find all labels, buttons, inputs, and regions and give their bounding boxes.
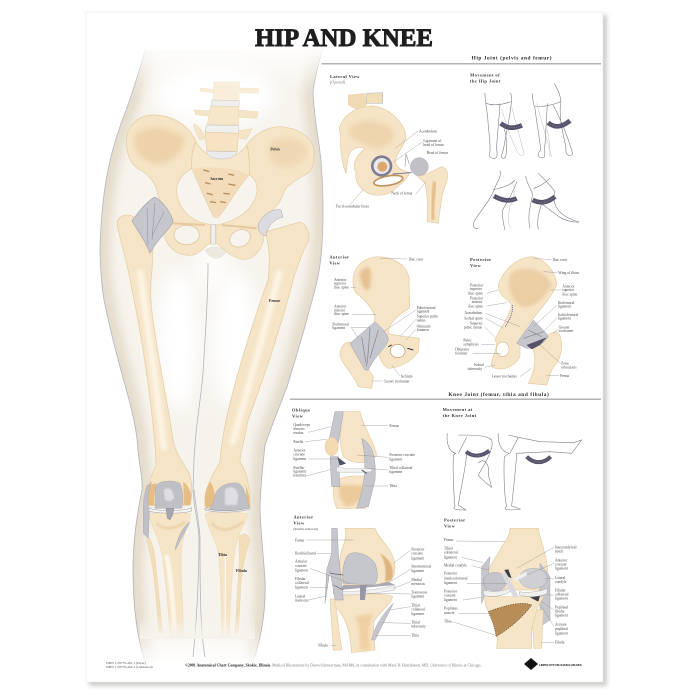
- body silhouette: [100, 48, 323, 662]
- labels: posterior hip: Wing of ilium: [558, 271, 579, 275]
- publisher logo: [524, 658, 582, 670]
- section: anterior and posterior knee views: [293, 514, 577, 653]
- left knee, tibia and fibula: [143, 481, 192, 637]
- labels: anterior knee, right side: ligament: [411, 556, 424, 560]
- labels: anterior hip: Iliofemoral: [332, 322, 349, 326]
- labels: anterior hip: iliac spine: [334, 285, 349, 289]
- labels: anterior knee, right side: Posterior: [411, 548, 425, 552]
- labels: femur, tibia, fibula: [218, 299, 281, 573]
- labels: posterior knee: muscle: [444, 611, 455, 615]
- labels: anterior knee, right side: ligament: [411, 569, 424, 573]
- pelvic floor form: [205, 247, 226, 258]
- anterior knee diagram: [325, 528, 395, 653]
- heading: movement of the hip joint: the Hip Joint: [470, 79, 501, 84]
- labels: anterior knee, left side: Anterior: [293, 514, 313, 519]
- heading: movement of the knee joint: Movement at: [443, 407, 473, 412]
- labels: anterior knee, left side: (Patella removed): [293, 527, 318, 531]
- labels: anterior hip: Ischium: [401, 374, 413, 378]
- labels: posterior hip: orbicularis: [561, 365, 577, 369]
- labels: posterior hip: tuberosity: [468, 367, 482, 371]
- labels: posterior hip: foramen: [455, 352, 467, 356]
- labels: oblique knee, right side: ligament: [389, 470, 402, 474]
- labels: oblique knee, left side: Patellar: [293, 466, 305, 470]
- labels: oblique knee, left side: Anterior: [293, 449, 307, 453]
- labels: posterior hip: Posterior: [470, 283, 484, 287]
- bone fade at shins: [140, 615, 255, 639]
- labels: posterior hip: iliac spine: [468, 304, 483, 308]
- labels: lateral view: Acetabulum: [419, 129, 437, 133]
- labels: posterior hip: ligament: [558, 317, 571, 321]
- labels: posterior knee: Fibula: [555, 640, 565, 644]
- labels: oblique knee, left side: Oblique: [292, 408, 311, 413]
- labels: anterior knee, right side: Transverse: [411, 590, 428, 594]
- labels: posterior knee: notch: [555, 550, 563, 554]
- labels: posterior knee: Popliteal: [555, 605, 568, 609]
- labels: anterior hip: Obturator: [417, 324, 432, 328]
- publisher logo: LIPPINCOTT WILLIAMS & WILKINS: [539, 663, 582, 667]
- labels: posterior knee: Femur: [444, 538, 454, 542]
- labels: oblique knee, right side: Femur: [389, 424, 400, 428]
- labels: posterior knee: ligament: [555, 597, 568, 601]
- labels: anterior knee, right side: ligament: [411, 612, 424, 616]
- labels: anterior hip: Anterior: [334, 278, 347, 282]
- labels: posterior hip: superior: [470, 287, 483, 291]
- labels: anterior hip: Lesser trochanter: [384, 379, 410, 383]
- labels: anterior knee, right side: Tibial: [411, 604, 420, 608]
- section: hip joint, anterior and posterior views: [290, 254, 601, 400]
- lumbar vertebrae: [193, 82, 258, 152]
- section heading: hip joint: Hip Joint (pelvis and femur): [472, 54, 552, 61]
- labels: posterior knee: cruciate: [555, 562, 567, 566]
- labels: posterior hip: [455, 257, 579, 379]
- labels: posterior hip: Pubic: [463, 339, 472, 343]
- labels: posterior hip: Posterior: [470, 296, 484, 300]
- labels: lateral view: [330, 74, 449, 208]
- labels: anterior knee, left side: collateral: [295, 581, 309, 585]
- hip movement figure 4: [526, 173, 579, 229]
- labels: posterior hip: ligament: [558, 305, 571, 309]
- pubic symphysis: [211, 224, 216, 244]
- labels: oblique knee, left side: tendon: [293, 431, 303, 435]
- labels: anterior knee, right side: tuberosity: [411, 625, 426, 629]
- knee movement figure: extension: [498, 433, 582, 510]
- labels: anterior knee, right side: meniscus: [411, 582, 426, 586]
- pelvis: [127, 115, 314, 259]
- labels: posterior knee: ligament: [444, 555, 457, 559]
- labels: anterior knee, left side: ligament: [295, 568, 308, 572]
- right knee, tibia and fibula: [205, 482, 250, 637]
- footer: ISBN numbers: [106, 661, 153, 669]
- labels: oblique knee, right side: ligament: [389, 457, 402, 461]
- labels: posterior hip: Zona: [561, 362, 569, 366]
- main figure: front view of pelvis and legs: [100, 48, 323, 662]
- footer: ISBN numbers: ISBN 1-58779-465-1 (Paper): [106, 661, 146, 665]
- labels: lateral view: Ligament of: [423, 139, 442, 143]
- hip movement figure 1: [485, 93, 524, 158]
- posterior knee diagram: [482, 528, 550, 648]
- labels: posterior knee: collateral: [444, 550, 458, 554]
- labels: posterior knee: Tibia: [444, 620, 452, 624]
- title: HIP AND KNEE: [255, 25, 433, 52]
- labels: posterior hip: Lesser trochanter: [492, 375, 518, 379]
- heading: movement of the hip joint: [470, 73, 501, 84]
- left hip capsule: [132, 197, 173, 253]
- labels: posterior hip: Anterior: [562, 284, 575, 288]
- labels: posterior knee: Posterior: [444, 589, 458, 593]
- labels: posterior knee: [444, 518, 577, 644]
- anterior hip diagram: [340, 257, 419, 388]
- oblique knee diagram: [325, 412, 377, 508]
- labels: posterior knee: ligament: [444, 598, 457, 602]
- labels: femur, tibia, fibula: Fibula: [236, 569, 247, 573]
- labels: posterior knee: ligament: [555, 567, 568, 571]
- right hip capsule: [258, 210, 283, 236]
- labels: oblique knee, left side: cruciate: [293, 453, 305, 457]
- labels: anterior knee, left side: Anterior: [295, 560, 308, 564]
- labels: posterior knee: ligament: [444, 581, 457, 585]
- labels: posterior knee: Posterior: [444, 518, 466, 523]
- right femur and capsule: [205, 210, 309, 507]
- labels: anterior hip: Anterior: [334, 305, 347, 309]
- labels: anterior knee, right side: collateral: [411, 608, 425, 612]
- labels: posterior hip: Posterior: [470, 257, 492, 262]
- labels: femur, tibia, fibula: Femur: [269, 299, 281, 303]
- lateral view diagram: [339, 93, 448, 223]
- poster sheet with drop shadow: [86, 12, 607, 686]
- posterior hip diagram: [491, 257, 562, 385]
- labels: anterior knee, left side: cruciate: [295, 564, 307, 568]
- labels: lateral view: Lateral View: [330, 74, 360, 79]
- labels: posterior knee: Intercondyloid: [555, 546, 577, 550]
- labels: oblique knee, left side: (tendon): [293, 474, 307, 478]
- footer: ISBN numbers: ISBN 1-58779-464-3 (Laminated): [106, 665, 153, 669]
- labels: posterior hip: symphysis: [463, 343, 479, 347]
- labels: posterior hip: Femur: [560, 374, 570, 378]
- left femur and capsule: [117, 197, 192, 505]
- labels: posterior hip: inferior: [472, 300, 483, 304]
- labels: posterior hip: pubic ramus: [464, 325, 483, 329]
- labels: posterior knee: popliteal: [555, 627, 568, 631]
- labels: anterior knee, left side: [293, 514, 353, 603]
- labels: posterior hip: Obturator: [455, 348, 470, 352]
- labels: anterior knee, right side: Tibia: [411, 634, 419, 638]
- labels: pelvis and sacrum: Pelvis: [270, 147, 280, 151]
- labels: posterior hip: Iliofemoral: [558, 301, 574, 305]
- labels: oblique knee, right side: Posterior cruciate: [389, 453, 415, 457]
- labels: oblique knee, left side: ligament: [293, 470, 306, 474]
- labels: posterior knee: Posterior: [444, 572, 458, 576]
- labels: anterior hip: Pubofemoral: [417, 306, 436, 310]
- labels: oblique knee, right side: Tibia: [389, 484, 397, 488]
- labels: oblique knee, left side: femoris: [293, 427, 305, 431]
- labels: posterior knee: Arcuate: [555, 623, 567, 627]
- labels: anterior hip: Superior pubic: [417, 315, 439, 319]
- labels: posterior knee: ligament: [555, 614, 568, 618]
- labels: posterior knee: fibular: [555, 609, 566, 613]
- labels: posterior hip: Greater: [559, 325, 570, 329]
- iliac shading: [134, 127, 185, 164]
- labels: anterior hip: ligament: [417, 310, 429, 314]
- labels: posterior knee: cruciate: [444, 593, 456, 597]
- labels: posterior hip: Ischiofemoral: [558, 313, 578, 317]
- labels: posterior hip: View: [470, 263, 482, 268]
- left hip bone: [127, 115, 211, 255]
- labels: posterior hip: Iliac crest: [553, 258, 567, 262]
- labels: posterior knee: Popliteus: [444, 606, 458, 610]
- labels: oblique knee, left side: [292, 408, 338, 478]
- section heading: knee joint: Knee Joint (femur, tibia and fibula): [448, 391, 549, 398]
- labels: lateral view: Head of femur: [427, 151, 449, 155]
- labels: anterior hip: iliac spine: [334, 312, 349, 316]
- labels: lateral view: Neck of femur: [391, 191, 413, 195]
- labels: anterior knee, left side: View: [293, 520, 305, 525]
- hip movement figure 3: [473, 171, 517, 230]
- labels: anterior knee, left side: Femur: [295, 538, 305, 542]
- labels: anterior hip: Anterior: [329, 254, 349, 259]
- labels: posterior knee: ligament: [555, 631, 568, 635]
- section: hip joint, upper row: [322, 54, 601, 230]
- labels: anterior knee, left side: meniscus: [295, 599, 309, 603]
- labels: anterior knee, right side: Tibial: [411, 620, 420, 624]
- labels: anterior hip: inferior: [334, 308, 346, 312]
- labels: lateral view: head of femur: [423, 143, 445, 147]
- labels: posterior hip: iliac spine: [562, 292, 578, 296]
- labels: anterior knee, left side: Lateral: [295, 594, 305, 598]
- footer: copyright and credits: ©2001 Anatomical Chart Company, Skokie, Illinois. Medical Illustrations by Dawn Schmerrman, MAMS, in consultation with Mark R. Hutchinson, MD, University of Illinois at Chicago.: [185, 662, 481, 668]
- labels: pelvis and sacrum: Sacrum: [210, 177, 224, 181]
- labels: anterior knee, right side: [318, 548, 431, 648]
- sacrum: [192, 142, 249, 217]
- labels: posterior hip: iliac spine: [468, 291, 483, 295]
- heading: movement of the knee joint: the Knee Joint: [443, 413, 477, 418]
- labels: posterior hip: superior: [562, 288, 575, 292]
- labels: pelvis and sacrum: [210, 147, 280, 181]
- labels: posterior knee: meniscofemoral: [444, 576, 468, 580]
- heading: movement of the knee joint: [443, 407, 477, 418]
- labels: oblique knee, left side: View: [292, 413, 304, 418]
- labels: oblique knee, right side: [357, 424, 415, 488]
- labels: posterior hip: Superior: [470, 321, 483, 325]
- labels: anterior hip: foramen: [417, 328, 429, 332]
- labels: anterior knee, left side: Fibular: [295, 577, 306, 581]
- labels: lateral view: Fat in acetabular fossa: [336, 204, 369, 208]
- labels: posterior hip: Ischial: [474, 363, 484, 367]
- obturator foramina: [174, 225, 199, 245]
- labels: anterior knee, right side: Medial: [411, 578, 422, 582]
- section rule: [290, 398, 601, 401]
- heading: movement of the hip joint: Movement of: [470, 73, 500, 78]
- labels: anterior knee, left side: ligament: [295, 585, 308, 589]
- labels: oblique knee, left side: Quadriceps: [293, 423, 311, 427]
- labels: posterior knee: View: [444, 523, 456, 528]
- labels: posterior knee: Medial condyle: [444, 564, 467, 568]
- labels: oblique knee, left side: Patella: [293, 440, 304, 444]
- labels: anterior hip: superior: [334, 282, 347, 286]
- labels: posterior hip: trochanter: [559, 329, 574, 333]
- labels: lateral view: (Opened): [330, 80, 346, 85]
- labels: anterior hip: Iliac crest: [409, 257, 423, 261]
- labels: anterior hip: ramus: [417, 318, 426, 322]
- labels: oblique knee, right side: Tibial collateral: [389, 466, 412, 470]
- labels: posterior knee: Anterior: [555, 558, 568, 562]
- section rule: [322, 62, 601, 65]
- labels: anterior hip: [329, 254, 439, 383]
- knee movement figure: flexion: [447, 433, 492, 510]
- right hip bone: [216, 127, 314, 259]
- labels: anterior knee, right side: cruciate: [411, 552, 423, 556]
- labels: anterior knee, right side: Fibula: [318, 644, 328, 648]
- hip movement figure 2: [532, 83, 573, 157]
- labels: oblique knee, left side: ligament: [293, 457, 306, 461]
- labels: posterior hip: Ischial spine: [464, 316, 483, 320]
- labels: posterior knee: Tibial: [444, 546, 453, 550]
- labels: posterior knee: Fibular: [555, 588, 566, 592]
- labels: anterior knee, right side: Intermeniscal: [411, 565, 431, 569]
- labels: posterior knee: Lateral: [555, 576, 565, 580]
- section: oblique knee and knee movement: [292, 407, 582, 510]
- labels: posterior knee: condyle: [555, 580, 567, 584]
- labels: posterior hip: Acetabulum: [464, 311, 482, 315]
- labels: anterior knee, right side: ligament: [411, 595, 424, 599]
- labels: anterior hip: View: [329, 260, 341, 265]
- labels: anterior knee, left side: Iliotibial band: [295, 551, 316, 555]
- labels: anterior hip: ligament: [332, 326, 345, 330]
- labels: posterior knee: collateral: [555, 592, 569, 596]
- labels: femur, tibia, fibula: Tibia: [218, 553, 227, 557]
